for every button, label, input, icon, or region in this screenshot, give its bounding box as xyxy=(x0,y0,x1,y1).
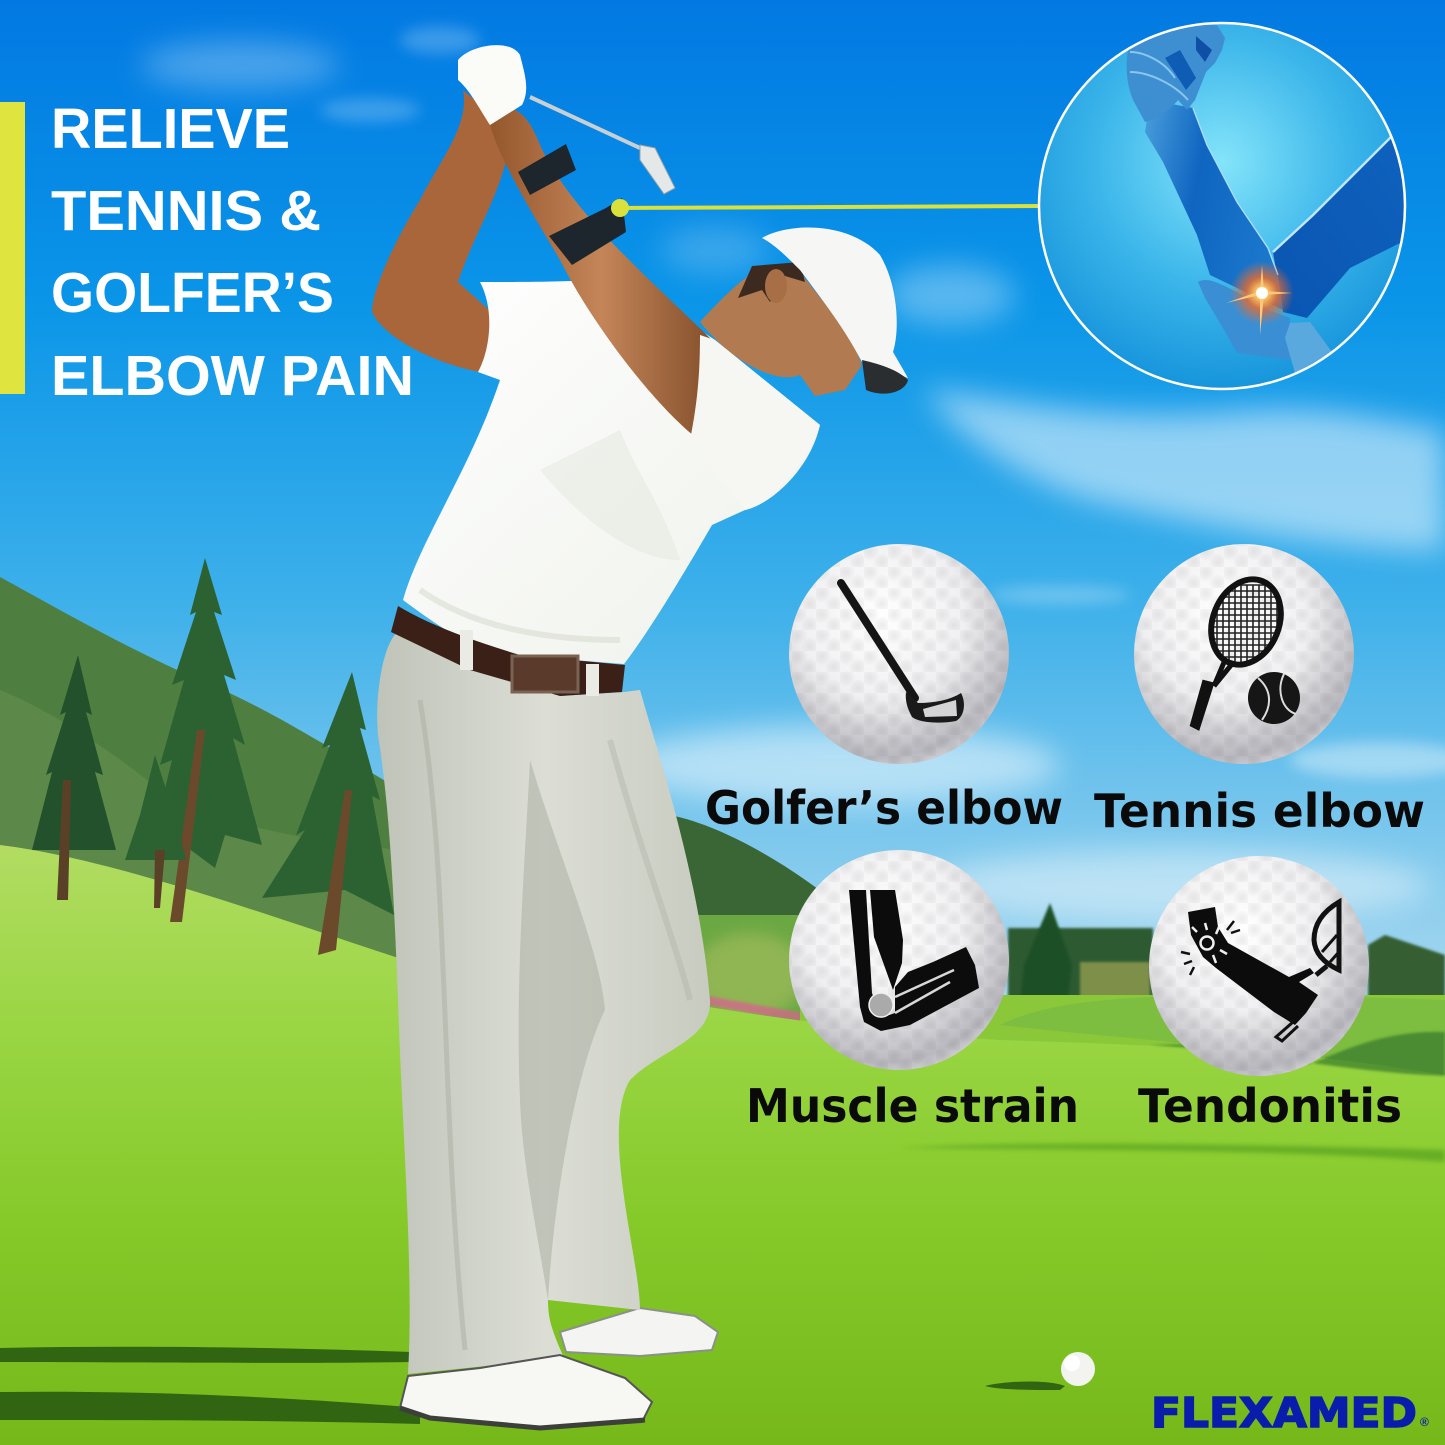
golfer photo figure xyxy=(372,45,908,1428)
medical elbow circle xyxy=(1039,23,1412,389)
golf ball icon: muscle strain xyxy=(789,850,1009,1070)
golfer: rear shoe xyxy=(560,1308,718,1356)
brand logo: ® xyxy=(1420,1415,1429,1429)
grass xyxy=(0,845,1445,1445)
ground shadows xyxy=(0,1347,1065,1424)
golf ball icon: golf club xyxy=(789,544,1009,764)
brand logo: FLEXAMED xyxy=(1151,1389,1417,1437)
pain burst xyxy=(1230,261,1294,325)
golfer: trousers xyxy=(377,632,710,1374)
forearm xyxy=(1145,100,1283,310)
golf ball icon: tendonitis xyxy=(1149,856,1369,1076)
hand on elbow xyxy=(1198,280,1290,360)
supporting wrist xyxy=(1285,322,1332,373)
golfer: belt xyxy=(391,606,625,696)
golfer: shirt xyxy=(403,280,820,664)
golf ball icon: tennis racket xyxy=(1134,544,1354,764)
yellow accent bar xyxy=(0,102,25,394)
title: RELIEVE xyxy=(51,97,290,161)
clouds xyxy=(140,26,1445,921)
golfer: front shoe xyxy=(400,1355,652,1428)
callout line xyxy=(611,199,1040,217)
title: TENNIS & xyxy=(51,179,321,243)
upper arm xyxy=(1273,133,1412,318)
golfer: front arm xyxy=(490,108,712,436)
trees xyxy=(32,558,394,955)
golf ball on tee xyxy=(1061,1352,1095,1386)
title xyxy=(51,97,414,408)
golfer: cap xyxy=(762,228,908,378)
golfer: armbands xyxy=(518,144,576,195)
title: ELBOW PAIN xyxy=(51,344,414,408)
label: Tendonitis: Tendonitis xyxy=(1138,1079,1402,1133)
golfer: club xyxy=(530,97,640,148)
golfer: neck and head xyxy=(700,268,862,396)
golfer: glove xyxy=(458,45,526,125)
fist xyxy=(1127,24,1225,122)
title: GOLFER’S xyxy=(51,261,334,325)
label: Tennis elbow: Tennis elbow xyxy=(1094,784,1425,838)
background sky xyxy=(0,0,1445,1000)
hills and distant landscape xyxy=(0,577,1445,1085)
golfer: back arm xyxy=(372,90,510,372)
label: Golfer's elbow: Golfer’s elbow xyxy=(705,781,1063,835)
label: Muscle strain: Muscle strain xyxy=(746,1079,1079,1133)
